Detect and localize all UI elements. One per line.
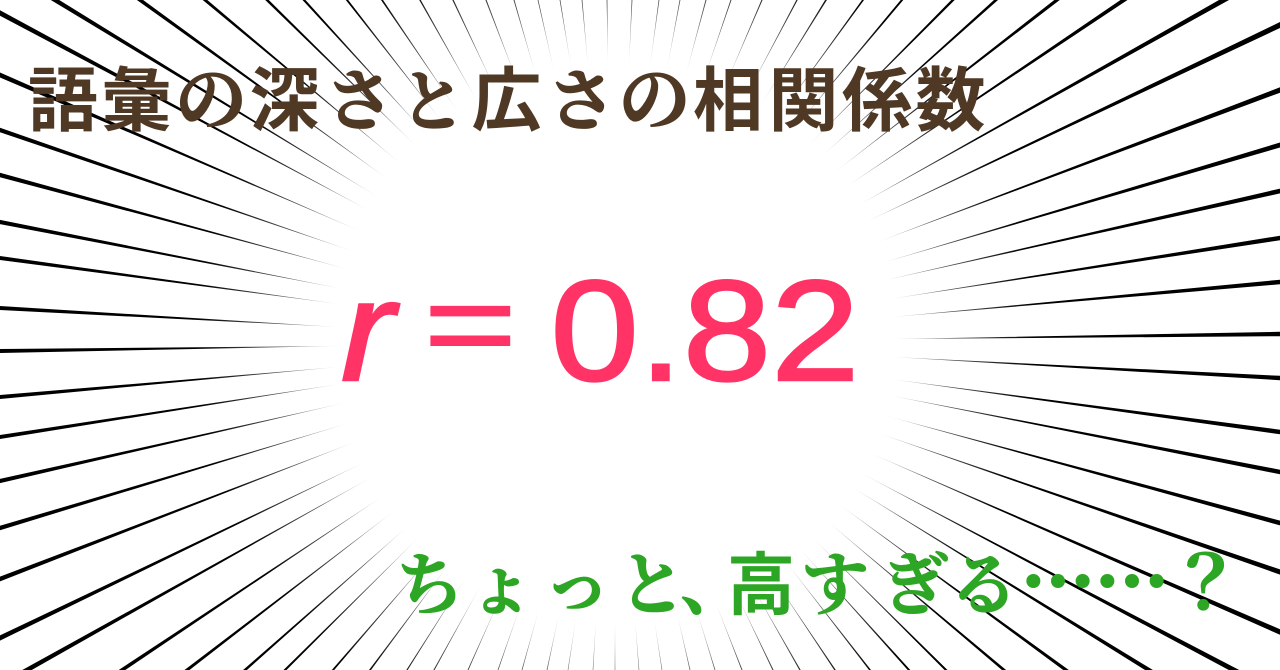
- title: さ: [325, 64, 394, 140]
- title: 彙: [102, 62, 172, 140]
- subtitle comment: 高: [727, 548, 795, 624]
- title: 関: [768, 62, 838, 140]
- title: 数: [916, 62, 986, 140]
- title: の: [175, 61, 247, 141]
- subtitle comment: …: [1021, 524, 1095, 631]
- title: 深: [250, 62, 320, 140]
- subtitle comment: ぎ: [881, 548, 949, 624]
- number 0.82: 0.82: [550, 251, 859, 411]
- variable r: r: [341, 251, 400, 411]
- subtitle comment: ょ: [467, 548, 535, 624]
- subtitle comment: る: [950, 548, 1018, 624]
- subtitle comment: っ: [543, 548, 611, 624]
- subtitle comment: ち: [396, 548, 464, 624]
- title: 広: [472, 62, 542, 140]
- title: 語: [28, 62, 98, 140]
- title: 相: [693, 62, 763, 140]
- title: 係: [842, 62, 912, 140]
- subtitle comment: …: [1095, 524, 1169, 631]
- title: さ: [547, 64, 616, 140]
- main value: correlation coefficient: [341, 251, 859, 411]
- title: の: [618, 61, 691, 141]
- subtitle comment: 、: [680, 548, 748, 624]
- subtitle comment: す: [801, 548, 869, 624]
- title: と: [400, 67, 466, 140]
- equals sign: =: [424, 257, 517, 390]
- subtitle comment: と: [618, 548, 686, 624]
- subtitle comment: ？: [1169, 544, 1243, 626]
